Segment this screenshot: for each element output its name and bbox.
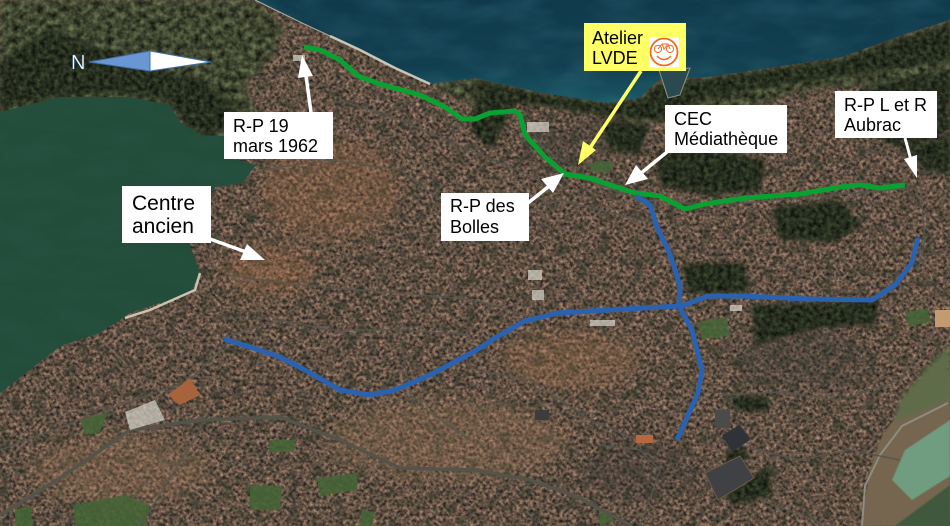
label: Centre ancien: Centre (132, 192, 195, 215)
fields (15, 160, 930, 526)
label: Atelier LVDE (578, 23, 686, 165)
label: Atelier LVDE: Atelier (592, 28, 643, 48)
label: R-P L et R Aubrac: Aubrac (844, 115, 901, 135)
label: Centre ancien: ancien (132, 215, 194, 238)
railway (0, 417, 632, 526)
label: R-P des Bolles: Bolles (450, 217, 499, 237)
sea (254, 0, 950, 103)
label: R-P L et R Aubrac: R-P L et R (844, 95, 927, 115)
marsh (860, 345, 950, 526)
lagoon (0, 97, 256, 393)
north letter: N (71, 52, 85, 74)
label: R-P des Bolles (441, 173, 564, 241)
label: Centre ancien (122, 186, 265, 260)
dark hills north-west (0, 0, 950, 140)
buildings (125, 55, 950, 500)
green route (304, 47, 905, 209)
compass needle west (89, 51, 150, 71)
label: CEC Mediatheque: CEC (674, 109, 712, 129)
blue route (224, 196, 918, 440)
label: CEC Mediatheque: Médiathèque (674, 129, 778, 149)
compass (71, 51, 211, 74)
urban tone variations (30, 120, 870, 505)
compass needle east (150, 51, 211, 71)
label: R-P 19 mars 1962 (224, 55, 333, 159)
icon: smiling bicycle (649, 37, 679, 67)
label: R-P 19 mars 1962: mars 1962 (233, 136, 318, 156)
label: R-P L et R Aubrac (835, 91, 937, 178)
label: CEC Mediatheque (625, 105, 787, 185)
label: R-P 19 mars 1962: R-P 19 (233, 116, 289, 136)
label: Atelier LVDE: LVDE (592, 48, 638, 68)
label: R-P des Bolles: R-P des (450, 196, 515, 216)
